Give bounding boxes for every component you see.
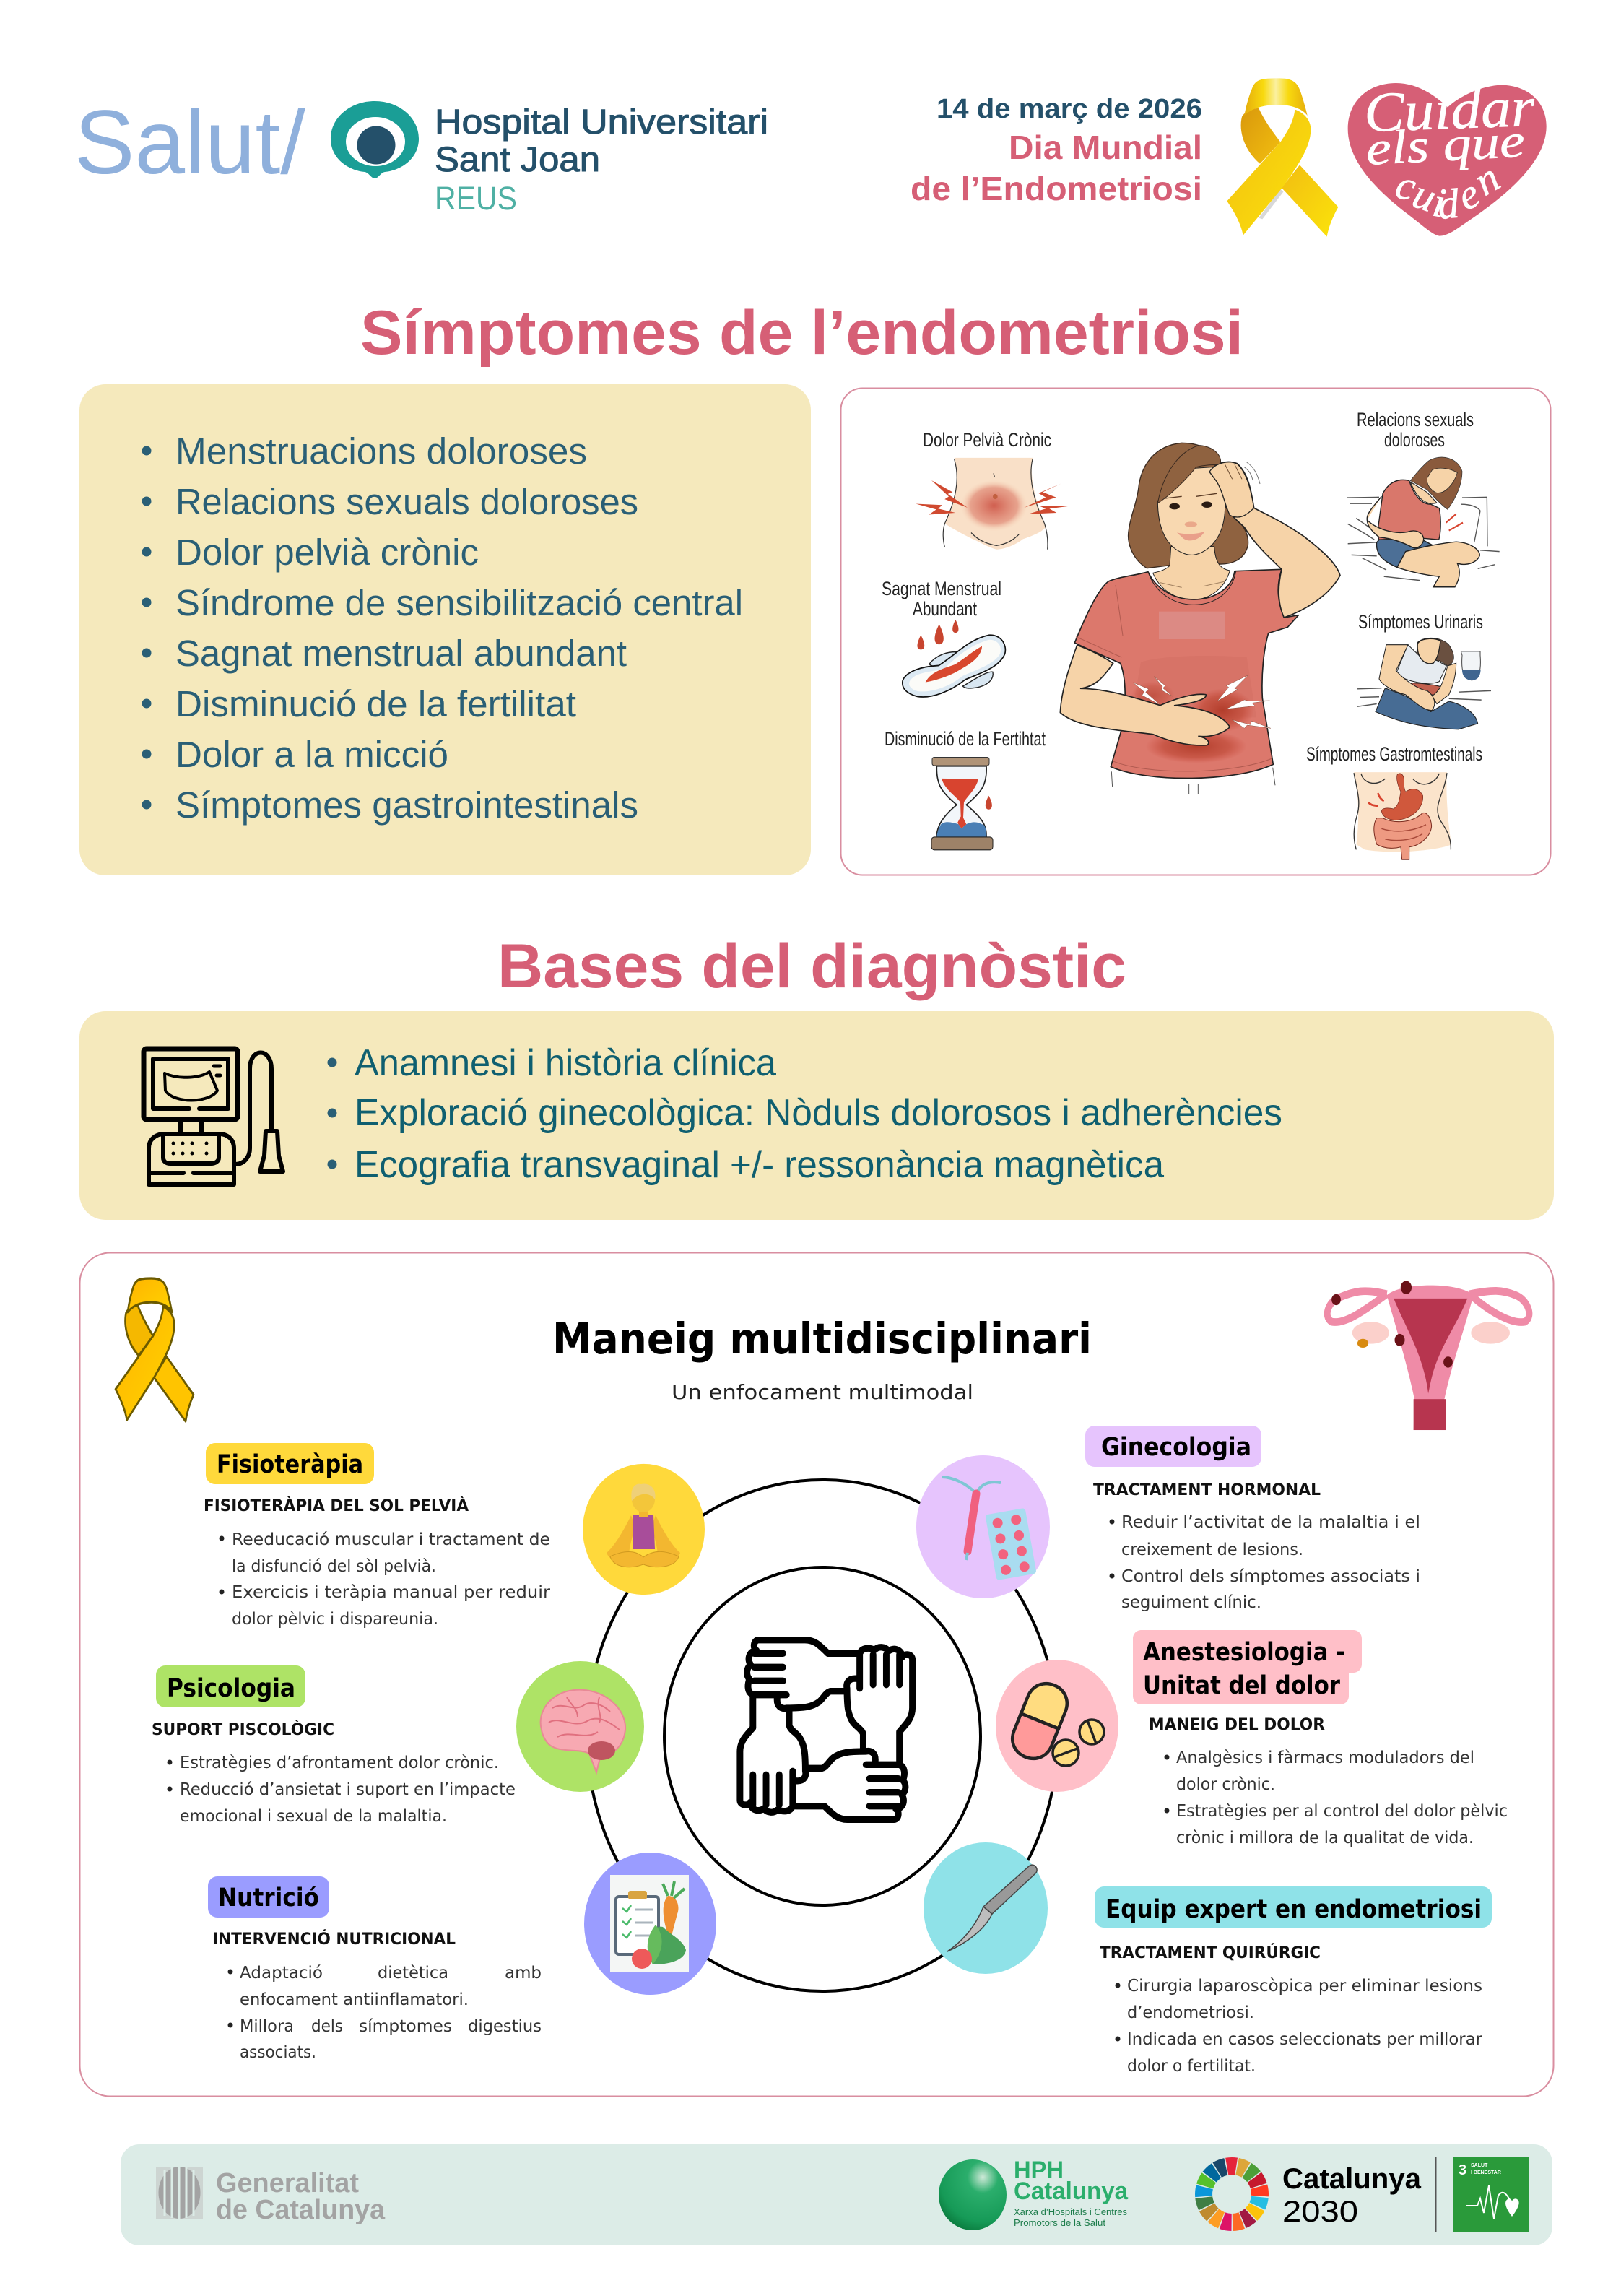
title: Bases del diagnòstic: Bases del diagnòstic <box>497 932 1126 1001</box>
illustration labels: Símptomes Gastromtestinals <box>1306 743 1482 765</box>
illustration labels: Relacions sexuals <box>1357 409 1474 430</box>
text: d’endometriosi. <box>1127 2003 1254 2022</box>
label <box>206 1443 374 1484</box>
event date and name <box>911 94 1202 207</box>
text: amb <box>505 1964 542 1983</box>
text: MANEIG DEL DOLOR <box>1149 1716 1325 1734</box>
diagram: rings <box>587 1480 1058 1991</box>
hospital name: Hospital Universitari <box>435 103 768 142</box>
title: Maneig multidisciplinari: Maneig multidisciplinari <box>552 1314 1092 1364</box>
text: Estratègies per al control del dolor pèlvic <box>1176 1802 1508 1821</box>
text: seguiment clínic. <box>1121 1593 1261 1612</box>
event date and name: 14 de març de 2026 <box>936 94 1202 124</box>
text: Reeducació muscular i tractament de <box>232 1530 550 1549</box>
node: Nutrició <box>208 1853 716 2062</box>
text: dolor o fertilitat. <box>1127 2057 1256 2076</box>
node: Equip expert <box>924 1842 1492 2076</box>
logo: Generalitat emblem <box>156 2167 203 2219</box>
illustration labels <box>882 409 1483 765</box>
heart: cuidar els que cuiden <box>1348 75 1547 236</box>
text: crònic i millora de la qualitat de vida. <box>1176 1829 1474 1847</box>
label <box>1095 1886 1492 1928</box>
node: Psicologia <box>152 1661 644 1826</box>
text: la disfunció del sòl pelvià. <box>232 1557 436 1576</box>
icon: SDG 3: SALUT <box>1471 2163 1488 2168</box>
text: Indicada en casos seleccionats per millorar <box>1127 2030 1483 2049</box>
Catalunya 2030 <box>1282 2163 1422 2228</box>
text <box>212 1930 542 2062</box>
event date and name: de l’Endometriosi <box>911 170 1202 207</box>
HPH Catalunya: Catalunya <box>1014 2178 1129 2205</box>
text: SUPORT PISCOLÒGIC <box>152 1720 334 1739</box>
text: associats. <box>240 2043 316 2062</box>
diagnosis list: Anamnesi i història clínica <box>355 1042 776 1084</box>
text <box>152 1720 516 1826</box>
hospital name: Sant Joan <box>435 141 600 179</box>
icon: SDG 3 <box>1453 2157 1529 2232</box>
text: enfocament antiinflamatori. <box>240 1990 469 2009</box>
heart: cuidar els que cuiden: Cuidar <box>1363 75 1536 144</box>
label <box>208 1876 329 1918</box>
HPH Catalunya <box>1014 2157 1129 2228</box>
panel: symptoms list: Sagnat menstrual abundant <box>175 633 627 674</box>
text <box>1149 1716 1508 1847</box>
label <box>1133 1630 1362 1704</box>
label <box>1085 1426 1261 1467</box>
panel: symptoms list <box>79 384 811 875</box>
panel: symptoms list: Dolor a la micció <box>175 734 448 775</box>
icon: scalpel <box>924 1842 1048 1974</box>
icon: SDG 3: 3 <box>1459 2162 1466 2178</box>
Generalitat de Catalunya: Generalitat <box>216 2168 359 2198</box>
text: creixement de lesions. <box>1121 1541 1303 1559</box>
panel: diagnosis <box>79 1011 1554 1220</box>
HPH Catalunya: Xarxa d’Hospitals i Centres <box>1014 2206 1127 2217</box>
label: Ginecologia <box>1101 1433 1251 1462</box>
heart: cuidar els que cuiden: els que <box>1365 115 1526 176</box>
illustration labels: Abundant <box>913 598 977 620</box>
diagnosis list <box>328 1042 1282 1186</box>
label: Psicologia <box>167 1674 295 1703</box>
illustration: painful intercourse <box>1347 457 1500 587</box>
panel: symptoms list: Síndrome de sensibilització central <box>175 582 743 623</box>
text: Estratègies d’afrontament dolor crònic. <box>180 1754 499 1772</box>
label: Unitat del dolor <box>1143 1671 1341 1700</box>
icon: SDG wheel <box>1192 2154 1272 2234</box>
footer panel <box>121 2144 1552 2245</box>
icon: joined hands <box>740 1640 913 1819</box>
diagnosis list: Ecografia transvaginal +/- ressonància magnètica <box>355 1144 1164 1186</box>
text: INTERVENCIÓ NUTRICIONAL <box>212 1930 456 1949</box>
illustration: hourglass <box>931 758 993 850</box>
icon: hospital drop <box>331 101 419 178</box>
panel: multidisciplinary management <box>79 1252 1554 2096</box>
illustration: urinary symptoms <box>1357 638 1491 729</box>
text: símptomes <box>359 2017 452 2036</box>
text: Analgèsics i fàrmacs moduladors del <box>1176 1749 1474 1767</box>
illustration: pelvic pain abdomen <box>916 458 1074 550</box>
label <box>156 1665 305 1707</box>
text: Millora <box>240 2017 294 2036</box>
panel: symptoms list: Dolor pelvià crònic <box>175 532 479 573</box>
illustration: menstrual pad <box>903 620 1005 697</box>
title: Símptomes: Símptomes de l’endometriosi <box>360 298 1243 368</box>
text: Control dels símptomes associats i <box>1121 1567 1420 1586</box>
icon: IUD and pills <box>916 1455 1050 1598</box>
text: digestius <box>468 2017 542 2036</box>
icon: yellow ribbon <box>1227 78 1338 237</box>
panel: symptoms list: Disminució de la fertilitat <box>175 683 576 724</box>
Generalitat de Catalunya: de Catalunya <box>216 2195 386 2225</box>
text: dolor pèlvic i dispareunia. <box>232 1610 438 1629</box>
illustration labels: Sagnat Menstrual <box>882 578 1001 599</box>
text: Reducció d’ansietat i suport en l’impacte <box>180 1780 516 1799</box>
text: emocional i sexual de la malaltia. <box>180 1807 447 1826</box>
text: Exercicis i teràpia manual per reduir <box>232 1583 551 1602</box>
subtitle: Un enfocament multimodal <box>672 1380 973 1404</box>
panel: symptoms list: Relacions sexuals doloroses <box>175 481 638 522</box>
text: dels <box>311 2017 343 2036</box>
text: FISIOTERÀPIA DEL SOL PELVIÀ <box>204 1496 469 1515</box>
icon: pills <box>996 1660 1118 1792</box>
text: Adaptació <box>240 1964 323 1983</box>
icon: SDG 3: I BENESTAR <box>1471 2170 1501 2175</box>
text <box>204 1496 551 1629</box>
text: Reduir l’activitat de la malaltia i el <box>1121 1513 1420 1532</box>
illustration labels: Símptomes Urinaris <box>1358 611 1483 633</box>
divider <box>1435 2157 1437 2232</box>
hospital name <box>435 103 768 179</box>
Catalunya 2030: 2030 <box>1282 2194 1358 2228</box>
node: Anestesiologia <box>996 1630 1508 1847</box>
text <box>1093 1481 1420 1612</box>
event date and name: Dia Mundial <box>1009 129 1202 166</box>
logo: Hospital Universitari Sant Joan Reus <box>331 101 768 217</box>
text: dolor crònic. <box>1176 1775 1275 1794</box>
text: TRACTAMENT QUIRÚRGIC <box>1100 1944 1321 1962</box>
icon: diet plan <box>584 1853 716 1995</box>
label: Equip expert en endometriosi <box>1105 1895 1482 1924</box>
label: Anestesiologia - <box>1143 1638 1345 1667</box>
icon: ultrasound machine <box>144 1049 283 1184</box>
icon: uterus <box>1327 1281 1529 1430</box>
logo: HPH sphere <box>939 2159 1007 2230</box>
text <box>1100 1944 1483 2076</box>
panel: symptoms illustration <box>840 389 1551 875</box>
Generalitat de Catalunya <box>216 2168 386 2225</box>
illustration: gastrointestinal <box>1354 772 1451 859</box>
panel: symptoms list: Símptomes gastrointestinals <box>175 784 638 826</box>
icon: yoga <box>583 1464 705 1595</box>
text: dietètica <box>378 1964 448 1983</box>
logo: Salut: Salut/ <box>74 92 305 193</box>
text: TRACTAMENT HORMONAL <box>1093 1481 1321 1499</box>
Reus: REUS <box>435 180 517 217</box>
node: Ginecologia <box>916 1426 1420 1612</box>
heart: cuidar els que cuiden: cuiden <box>1391 153 1508 228</box>
icon: brain <box>516 1661 644 1792</box>
panel: symptoms list: Menstruacions doloroses <box>175 430 587 472</box>
HPH Catalunya: HPH <box>1014 2157 1064 2184</box>
icon: small ribbon <box>116 1278 194 1421</box>
illustration labels: Dolor Pelvià Crònic <box>923 429 1051 451</box>
HPH Catalunya: Promotors de la Salut <box>1014 2217 1105 2228</box>
illustration: woman with pain <box>1060 443 1340 794</box>
text: Cirurgia laparoscòpica per eliminar lesions <box>1127 1977 1482 1996</box>
illustration labels: Disminució de la Fertihtat <box>885 728 1046 750</box>
label: Fisioteràpia <box>217 1450 363 1479</box>
label: Nutrició <box>218 1884 319 1912</box>
node: Fisioteràpia <box>204 1443 705 1629</box>
Catalunya 2030: Catalunya <box>1282 2163 1422 2195</box>
diagnosis list: Exploració ginecològica: Nòduls dolorosos i adherències <box>355 1092 1282 1134</box>
illustration labels: doloroses <box>1384 429 1445 451</box>
